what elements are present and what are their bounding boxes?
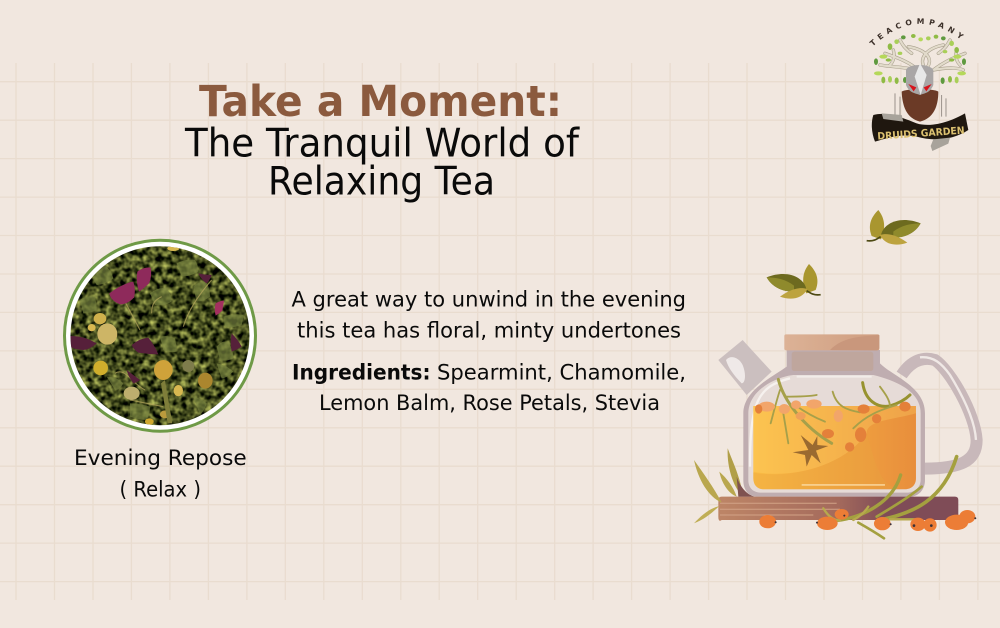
teapot handle [902, 357, 977, 469]
ingredients text: Lemon Balm, Rose Petals, Stevia [319, 391, 660, 416]
tea name label: ( Relax ) [120, 478, 201, 503]
icon: floating leaves upper [867, 210, 921, 245]
logo: Druids Garden tea company: DRUIDS GARDEN [877, 126, 965, 143]
wooden board [718, 497, 958, 521]
star anise [793, 435, 828, 467]
icon: tea blend photo in circular frame [64, 240, 256, 431]
teapot body [743, 350, 925, 497]
description text: A great way to unwind in the evening [292, 288, 686, 313]
herb sprigs around the base [694, 448, 957, 538]
logo: Druids Garden tea company [869, 18, 968, 151]
title: Relaxing Tea [268, 159, 495, 204]
ingredients text: Spearmint, Chamomile, [437, 360, 686, 385]
ingredients text [292, 360, 686, 416]
title: The Tranquil World of [184, 122, 580, 167]
teapot lid [784, 334, 879, 350]
title: Take a Moment: [199, 77, 562, 127]
orange berries on the board [759, 509, 976, 532]
tea name label: Evening Repose [74, 446, 247, 471]
description text: this tea has floral, minty undertones [297, 318, 681, 343]
tea liquid [753, 406, 916, 489]
teapot spout [718, 340, 772, 395]
logo: Druids Garden tea company: TEACOMPANY [869, 18, 964, 46]
tea name label [74, 446, 247, 503]
ingredients text: Ingredients: [292, 360, 430, 385]
illustration: glass teapot with sea buckthorn [694, 334, 977, 538]
title [184, 77, 580, 204]
icon: floating leaves lower [767, 264, 821, 299]
description text [292, 288, 686, 343]
floating berries and sprigs [755, 379, 911, 452]
